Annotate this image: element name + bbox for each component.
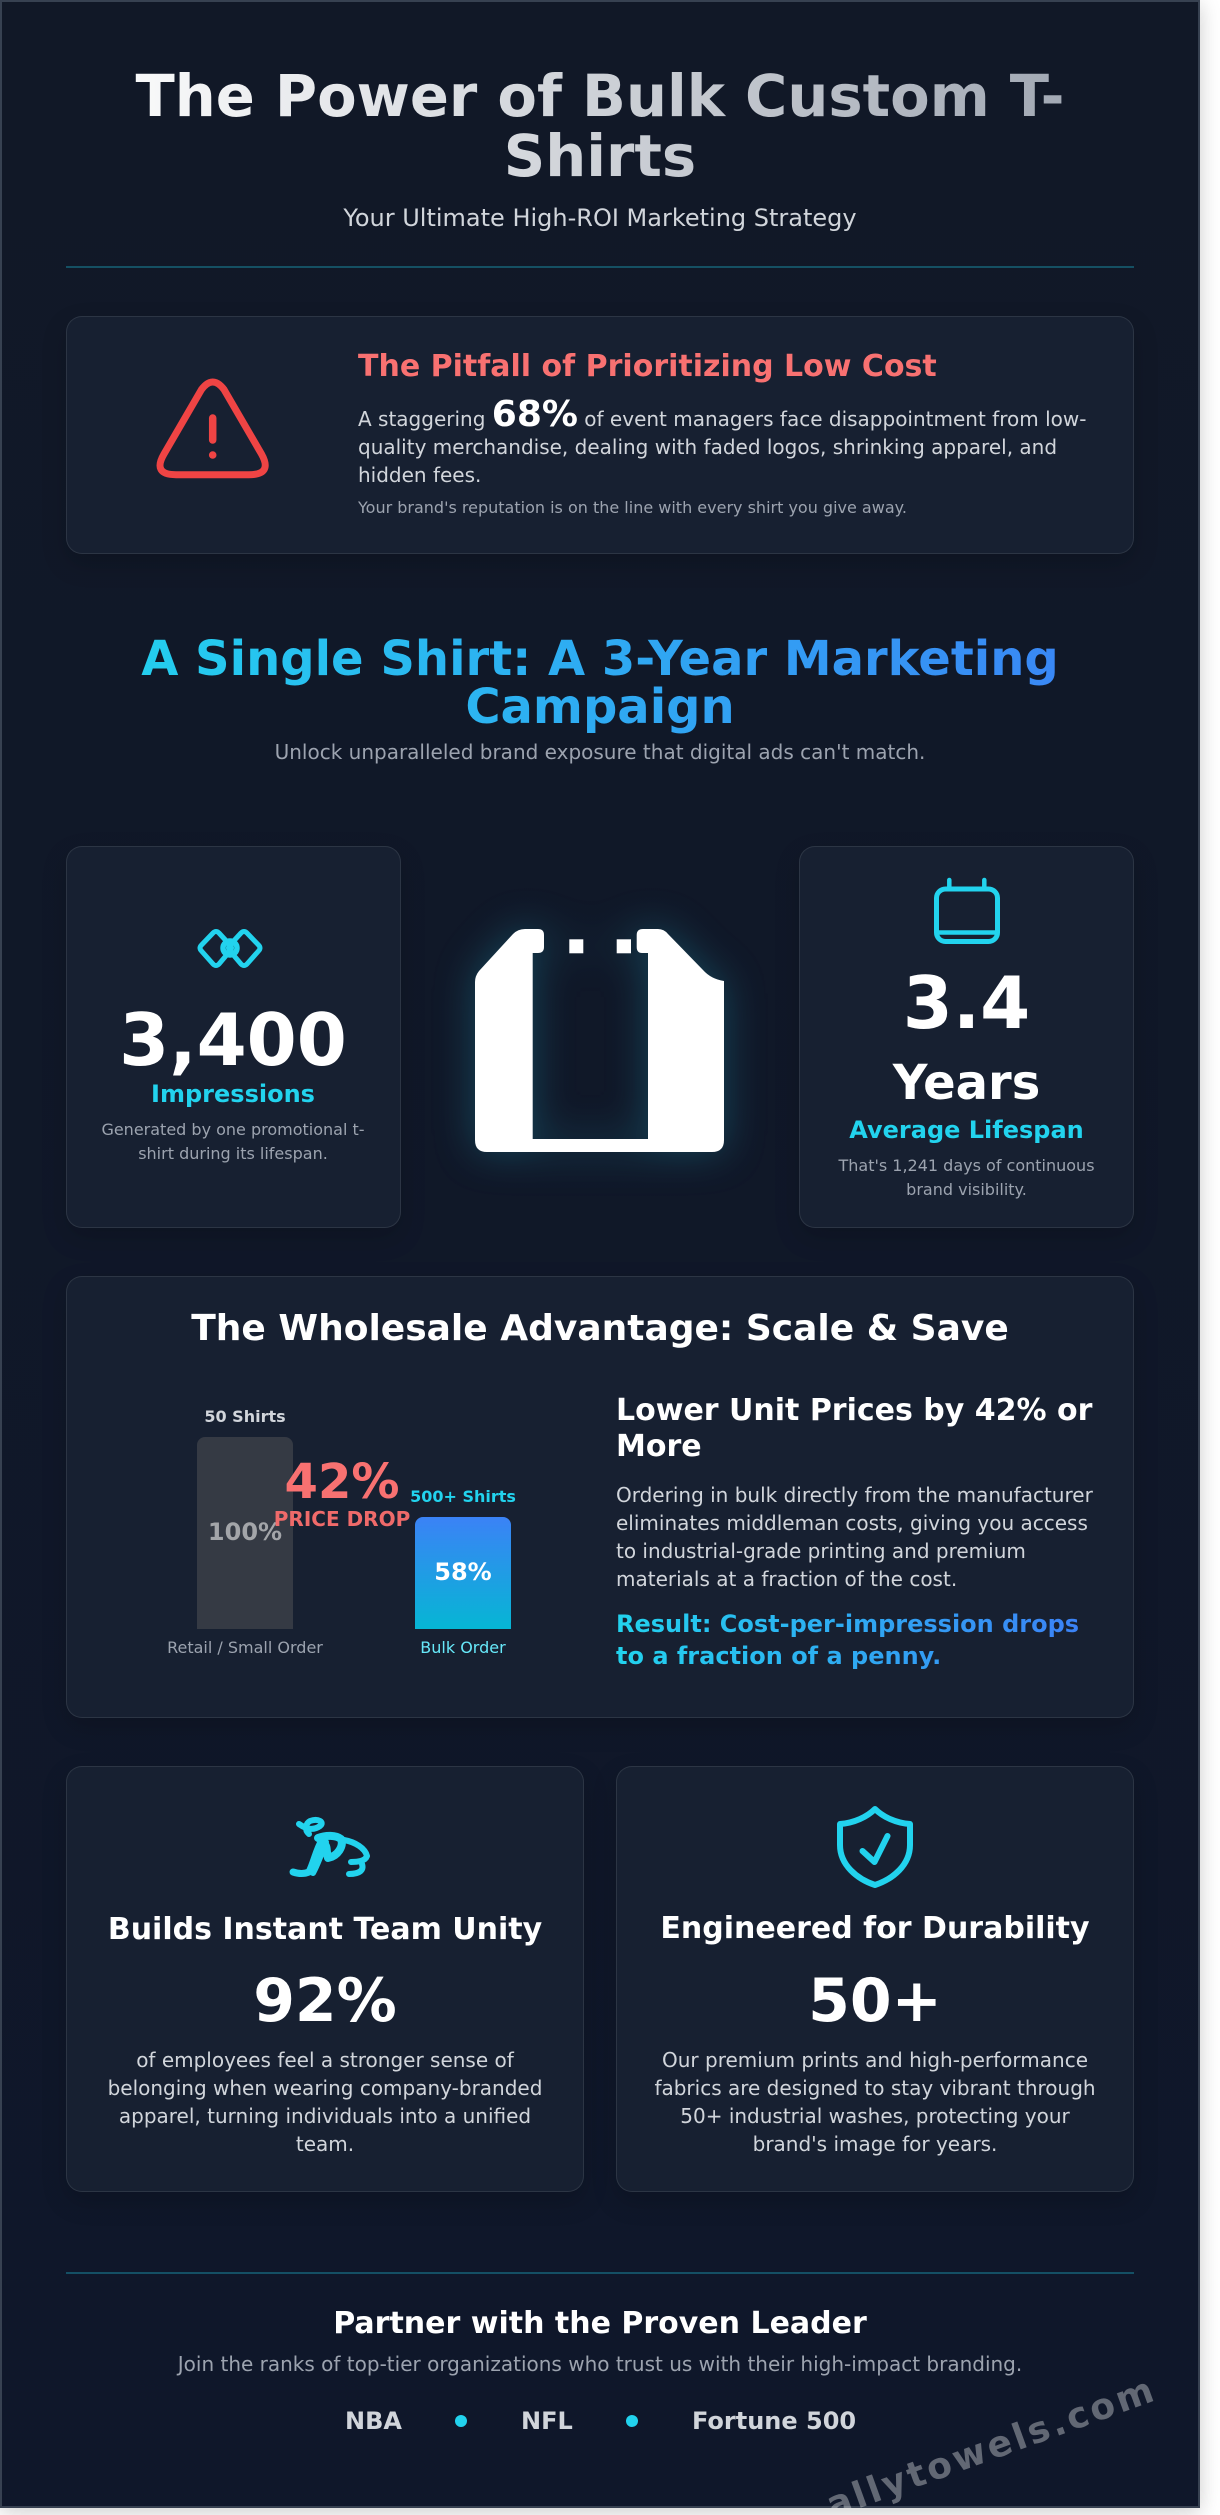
callout label: PRICE DROP <box>274 1507 410 1531</box>
wholesale result <box>616 1608 1078 1672</box>
panel: wholesale advantage <box>66 1276 1134 1718</box>
stat label: Average Lifespan <box>849 1116 1084 1144</box>
partner: NFL: NFL <box>521 2407 573 2435</box>
stat description: That's 1,241 days of continuous <box>838 1156 1095 1175</box>
wholesale paragraph: materials at a fraction of the cost. <box>616 1567 957 1591</box>
panel: pitfall of low cost <box>66 316 1134 554</box>
panel heading: The Wholesale Advantage: Scale & Save <box>191 1308 1009 1349</box>
card title: Engineered for Durability <box>660 1911 1090 1946</box>
section title <box>66 635 1134 741</box>
panel: lifespan <box>799 846 1134 1228</box>
wholesale text block <box>616 1393 1093 1670</box>
stat: 3.4: 3.4 <box>903 961 1030 1045</box>
stat description: Generated by one promotional t- <box>101 1120 365 1139</box>
card text <box>108 2048 542 2156</box>
bar label: 50 shirts: 50 Shirts <box>204 1407 286 1426</box>
card text: brand's image for years. <box>753 2132 997 2156</box>
card text <box>654 2048 1096 2156</box>
stat description: brand visibility. <box>906 1180 1027 1199</box>
header <box>135 63 1064 232</box>
pitfall note: Your brand's reputation is on the line with every shirt you give away. <box>358 498 907 517</box>
section subtitle: Unlock unparalleled brand exposure that digital ads can't match. <box>275 740 925 764</box>
wholesale subheading: Lower Unit Prices by 42% or <box>616 1393 1092 1428</box>
wholesale paragraph: eliminates middleman costs, giving you access <box>616 1511 1088 1535</box>
card text: of employees feel a stronger sense of <box>136 2048 514 2072</box>
wholesale paragraph: Ordering in bulk directly from the manufacturer <box>616 1483 1093 1507</box>
pitfall body text: hidden fees. <box>358 463 481 487</box>
card title: Builds Instant Team Unity <box>108 1912 542 1947</box>
pitfall body text: quality merchandise, dealing with faded logos, shrinking apparel, and <box>358 435 1057 459</box>
icon: eye diamonds <box>198 929 262 968</box>
section title: A Single Shirt: A 3-Year Marketing <box>141 631 1059 687</box>
panel: impressions <box>66 846 401 1228</box>
footer heading: Partner with the Proven Leader <box>333 2306 867 2341</box>
wholesale paragraph <box>616 1483 1093 1591</box>
wholesale subheading <box>616 1393 1092 1464</box>
title: Shirts <box>504 123 696 190</box>
icon: shield check <box>837 1806 913 1888</box>
section title: Campaign <box>465 679 735 735</box>
wholesale subheading: More <box>616 1429 702 1464</box>
stat: 92%: 92% <box>253 1966 397 2036</box>
bar axis label: bulk: Bulk Order <box>420 1638 506 1657</box>
panel: durability <box>616 1766 1134 2192</box>
footer <box>176 2306 1022 2435</box>
title: The Power of Bulk Custom T- <box>135 63 1064 130</box>
pitfall body text: A staggering 68% of event managers face disappointment from low- <box>358 394 1086 435</box>
panel: team unity <box>66 1766 584 2192</box>
card text: 50+ industrial washes, protecting your <box>680 2104 1070 2128</box>
bar value: 58%: 58% <box>434 1558 492 1586</box>
dot <box>455 2415 467 2427</box>
bar value: 100%: 100% <box>208 1518 282 1546</box>
wholesale result: Result: Cost-per-impression drops <box>616 1610 1079 1638</box>
stat unit: Years <box>893 1055 1040 1111</box>
card text: team. <box>296 2132 354 2156</box>
bar axis label: retail: Retail / Small Order <box>167 1638 323 1657</box>
bar chart <box>167 1407 516 1657</box>
callout value: 42% <box>285 1454 399 1510</box>
stat description: shirt during its lifespan. <box>138 1144 328 1163</box>
stat: 50+: 50+ <box>808 1966 942 2036</box>
icon: calendar <box>934 878 1000 944</box>
section heading: 3-year campaign <box>141 631 1059 764</box>
stat label: Impressions <box>151 1080 315 1108</box>
dot <box>626 2415 638 2427</box>
pitfall body text <box>358 394 1086 487</box>
card text: belonging when wearing company-branded <box>108 2076 542 2100</box>
partner: Fortune 500: Fortune 500 <box>692 2407 856 2435</box>
footer text: Join the ranks of top-tier organizations who trust us with their high-impact branding. <box>178 2352 1022 2376</box>
bar label: 500+ shirts: 500+ Shirts <box>410 1487 516 1506</box>
stat: 3,400: 3,400 <box>119 998 347 1082</box>
pitfall heading: The Pitfall of Prioritizing Low Cost <box>358 349 937 384</box>
bar: bulk <box>415 1517 511 1629</box>
stat description <box>838 1156 1095 1199</box>
card text: Our premium prints and high-performance <box>662 2048 1088 2072</box>
icon: team <box>290 1816 370 1877</box>
wholesale paragraph: to industrial-grade printing and premium <box>616 1539 1026 1563</box>
wholesale result: to a fraction of a penny. <box>616 1642 941 1670</box>
title <box>66 67 1134 187</box>
callout: 42% price drop <box>274 1454 410 1531</box>
subtitle: Your Ultimate High-ROI Marketing Strategy <box>343 204 857 232</box>
card text: apparel, turning individuals into a unified <box>119 2104 531 2128</box>
icon: t-shirt <box>457 917 742 1170</box>
icon: warning triangle <box>156 378 269 478</box>
card text: fabrics are designed to stay vibrant through <box>654 2076 1096 2100</box>
bar: retail <box>197 1437 293 1629</box>
partner: NBA: NBA <box>345 2407 402 2435</box>
stat description <box>101 1120 365 1163</box>
